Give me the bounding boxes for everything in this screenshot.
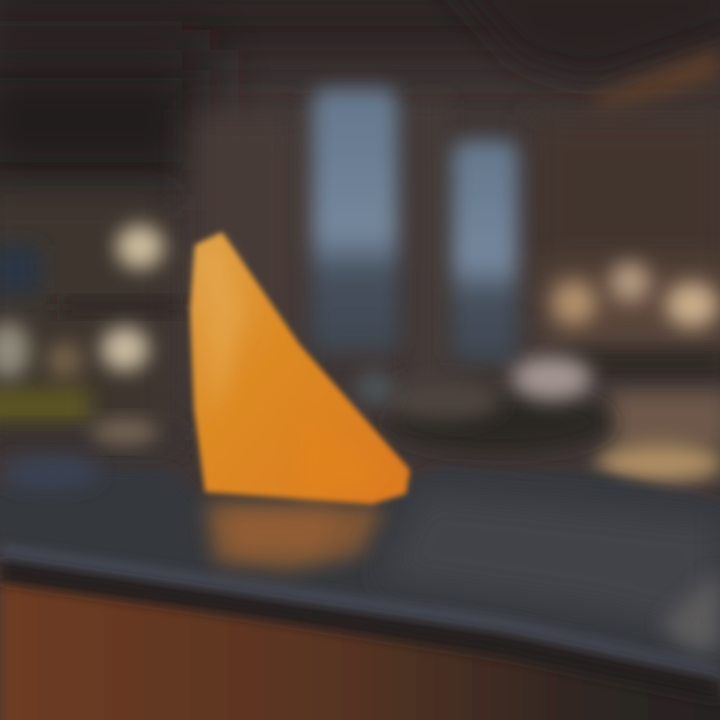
orange wedge <box>190 232 410 504</box>
ceiling and beam <box>440 0 720 285</box>
window left <box>312 88 398 353</box>
lower right warm counter glow <box>596 392 720 483</box>
wall lights on the right <box>540 262 720 376</box>
dark countertop <box>0 456 720 682</box>
window right <box>452 140 518 362</box>
bowl <box>357 356 612 452</box>
wedge reflection <box>205 502 385 570</box>
wood front <box>0 560 720 720</box>
shelf lights <box>0 225 164 444</box>
shelves on the left <box>0 195 180 454</box>
